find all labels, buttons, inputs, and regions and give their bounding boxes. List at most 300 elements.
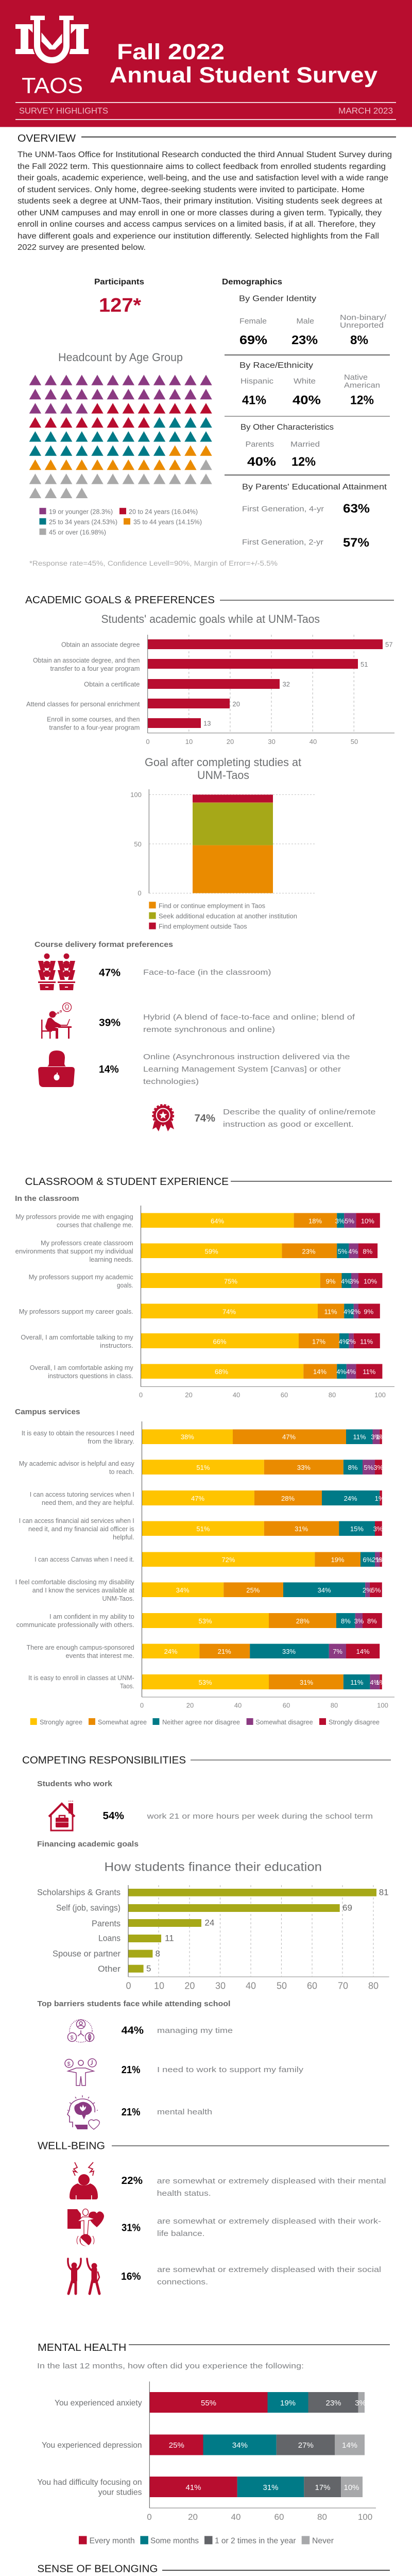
row: academic advisor: 51% (196, 1464, 210, 1471)
bar chart: financing: 80 (368, 1981, 379, 1991)
row: classroom environments (15, 1239, 377, 1263)
by gender identity: 23% (291, 333, 318, 347)
row: tutoring: 28% (281, 1495, 295, 1502)
date: MARCH 2023 (338, 106, 393, 116)
row: talking to instructors: 66% (213, 1337, 227, 1345)
panel: academic goals and preferences (25, 595, 394, 1131)
row: Canvas (35, 1552, 386, 1567)
heading: academic goals: ACADEMIC GOALS & PREFERENCES (25, 595, 215, 606)
stat: work-life balance: 31% (122, 2223, 141, 2234)
bar chart: financing: 0 (126, 1981, 131, 1991)
row: enrollment: It is easy to enroll in classes at UNM- (28, 1674, 134, 1682)
subheading: students who work: Students who work (37, 1780, 113, 1788)
row: asking questions: 14% (313, 1368, 327, 1376)
heading: demographics: Demographics (222, 278, 282, 286)
row: communication confidence: I am confident in my ability to (49, 1613, 134, 1620)
stat: hybrid: Hybrid (A blend of face-to-face and online; blend of (143, 1013, 355, 1022)
row: anxiety: 3% (355, 2399, 366, 2408)
row: engaging courses: courses that challenge me. (57, 1221, 133, 1229)
row: Canvas: 19% (331, 1556, 345, 1564)
row: tutoring: 24% (344, 1495, 357, 1502)
stat: face-to-face: 47% (99, 968, 121, 979)
stat: support family: 21% (122, 2064, 141, 2076)
stat: social connections: 16% (121, 2271, 141, 2282)
row: classroom environments: 4% (348, 1247, 358, 1255)
panel: competing responsibilities (22, 1755, 391, 2129)
stacked bar chart: campus services: 60 (283, 1701, 290, 1709)
stacked bar chart: classroom: 60 (281, 1391, 288, 1399)
row: engaging courses: 10% (361, 1217, 374, 1225)
row: academic goals support: 4% (341, 1278, 351, 1285)
icon: time management network (68, 2020, 94, 2042)
row: enrollment: Taos. (120, 1682, 134, 1690)
stacked bar chart: mental health frequency: 80 (317, 2512, 327, 2522)
panel: well-being (38, 2140, 389, 2294)
chart title: finance education: How students finance their education (104, 1860, 322, 1874)
heading: mental health: MENTAL HEALTH (38, 2342, 126, 2353)
bar chart: academic goals: transfer to a four year program (50, 665, 140, 672)
stacked bar: goal after completing: 100 (130, 791, 142, 799)
stacked bar chart: campus services: 100 (377, 1701, 388, 1709)
row: enrollment: 4% (370, 1679, 380, 1686)
stacked bar chart: classroom: 80 (329, 1391, 336, 1399)
row: career goals support (19, 1303, 380, 1318)
row: disability: UNM-Taos. (102, 1595, 134, 1602)
row: disability (15, 1578, 382, 1602)
stat: managing time: managing my time (157, 2026, 233, 2035)
stat: online quality: 74% (195, 1113, 215, 1124)
row: communication confidence: 8% (367, 1617, 377, 1625)
subheading: top barriers: Top barriers students face while attending school (37, 2000, 230, 2008)
row: academic advisor: My academic advisor is helpful and easy (19, 1460, 134, 1467)
heading: overview: OVERVIEW (18, 133, 76, 144)
row: asking questions: instructors questions in class. (48, 1372, 133, 1380)
row: academic advisor: 3% (373, 1464, 384, 1471)
row: financial aid: I can access financial aid services when I (19, 1517, 134, 1524)
bar chart: academic goals: 32 (282, 681, 290, 688)
stacked bar chart: mental health frequency: 100 (358, 2512, 372, 2522)
bar chart: financing: 70 (338, 1981, 348, 1991)
icon: person thinking at laptop (41, 1003, 72, 1039)
row: financial aid (19, 1517, 383, 1541)
icon: mental health head (67, 2095, 99, 2129)
stat: online: 14% (99, 1064, 119, 1075)
panel: demographics (222, 278, 390, 550)
by race/ethnicity: 12% (350, 394, 374, 407)
row: disability: 34% (176, 1586, 190, 1594)
icon: person with laptop (38, 1050, 75, 1087)
panel: overview (18, 133, 396, 252)
stat: students who work: 54% (103, 1810, 124, 1822)
by parents' educational attainment: 57% (343, 536, 369, 550)
overview paragraph: have different goals and experience our institution differently. Selected highlights from the Fall (18, 232, 379, 241)
by race/ethnicity (239, 361, 380, 407)
icon: two people with raised arms (68, 2259, 99, 2294)
row: library: 47% (282, 1433, 296, 1441)
bar chart: academic goals: 10 (185, 738, 193, 745)
row: engaging courses: 18% (308, 1217, 322, 1225)
stat: mental health status: health status. (157, 2189, 211, 2198)
by other characteristics: 40% (247, 455, 276, 469)
heading: participants: Participants (94, 278, 144, 286)
by gender identity: Female (239, 317, 267, 326)
bar chart: financing: 24 (204, 1918, 214, 1928)
row: Canvas: 72% (221, 1556, 235, 1564)
row: classroom environments: My professors create classroom (41, 1239, 133, 1247)
bar chart: financing: 8 (156, 1949, 160, 1959)
row: financial aid: 31% (295, 1525, 308, 1533)
stat: students who work: work 21 or more hours per week during the school term (147, 1812, 373, 1821)
row: talking to instructors: 17% (312, 1337, 325, 1345)
row: academic goals support: 75% (224, 1278, 237, 1285)
stat: hybrid: remote synchronous and online) (143, 1025, 275, 1034)
row: disability: 34% (318, 1586, 331, 1594)
stat: mental health status: 22% (122, 2175, 143, 2187)
row: academic goals support (29, 1273, 382, 1289)
legend: frequency: Every month (90, 2537, 135, 2546)
row: engaging courses: 5% (345, 1217, 354, 1225)
row: focusing difficulty: 10% (344, 2483, 359, 2492)
heading: sense of belonging: SENSE OF BELONGING (37, 2564, 158, 2575)
overview paragraph: of student services. Only home, degree-seeking students were invited to participate. Home (18, 185, 365, 194)
row: career goals support: 4% (344, 1308, 353, 1316)
row: library: It is easy to obtain the resources I need (22, 1429, 134, 1437)
row: campus events: There are enough campus-sponsored (27, 1643, 134, 1651)
row: campus events: 33% (282, 1648, 296, 1655)
row: career goals support: 11% (324, 1308, 337, 1316)
row: classroom environments: 59% (205, 1247, 218, 1255)
row: tutoring: 47% (191, 1495, 204, 1502)
bar chart: academic goals: Enroll in some courses, and then (47, 716, 140, 723)
subheading: course delivery: Course delivery format preferences (35, 941, 173, 949)
by parents' educational attainment (242, 483, 387, 550)
row: depression: You experienced depression (42, 2441, 142, 2450)
icon: person balancing money and time: $ (67, 2061, 71, 2067)
row: tutoring: 1% (375, 1495, 385, 1502)
stat: work-life balance: life balance. (157, 2229, 204, 2238)
by parents' educational attainment: First Generation, 2-yr (242, 538, 323, 547)
stacked bar chart: classroom (15, 1206, 394, 1399)
row: engaging courses (15, 1213, 380, 1229)
stat: online: Learning Management System [Canvas] or other (143, 1065, 341, 1074)
row: Canvas: 2% (372, 1556, 382, 1564)
stat: hybrid: 39% (99, 1018, 121, 1029)
by race/ethnicity: 41% (242, 394, 266, 407)
row: campus events (27, 1643, 380, 1659)
by race/ethnicity: American (344, 381, 380, 389)
row: academic advisor: to reach. (109, 1468, 134, 1476)
chart title: goal after completing (145, 756, 301, 782)
row: communication confidence (16, 1613, 382, 1629)
stacked bar chart: classroom: 0 (139, 1391, 143, 1399)
row: enrollment: 31% (300, 1679, 313, 1686)
row: academic goals support: My professors support my academic (29, 1273, 133, 1281)
row: asking questions: 4% (346, 1368, 356, 1376)
row: tutoring (30, 1490, 385, 1506)
row: campus events: events that interest me. (66, 1652, 134, 1659)
chart title: academic goals: Students' academic goals while at UNM-Taos (101, 613, 320, 625)
title (110, 40, 377, 88)
stat: 127 participants: 127* (99, 295, 141, 316)
bar chart: financing: 50 (277, 1981, 287, 1991)
row: campus events: 14% (356, 1648, 370, 1655)
row: communication confidence: communicate professionally with others. (16, 1621, 134, 1629)
bar chart: financing (37, 1885, 389, 1991)
stat: managing time: 44% (122, 2025, 144, 2036)
row: anxiety: 55% (201, 2399, 216, 2408)
row: asking questions: 11% (363, 1368, 376, 1376)
bar chart: financing: Scholarships & Grants (37, 1888, 121, 1897)
stat: mental health status (122, 2175, 386, 2198)
row: Canvas: 6% (363, 1556, 373, 1564)
legend: goal after completing (149, 902, 297, 930)
legend: frequency: Some months (150, 2537, 199, 2546)
chart title: headcount by age: Headcount by Age Group (58, 351, 183, 364)
bar chart: financing: 30 (215, 1981, 226, 1991)
row: career goals support: 2% (351, 1308, 361, 1316)
chart title: goal after completing: UNM-Taos (197, 769, 249, 782)
row: asking questions: 68% (215, 1368, 228, 1376)
by gender identity (239, 295, 387, 347)
bar chart: financing: Loans (98, 1933, 121, 1943)
by gender identity: Non-binary/ (340, 313, 387, 322)
legend: age groups: 25 to 34 years (24.53%) (49, 518, 117, 526)
bar chart: financing: 10 (154, 1981, 164, 1991)
row: enrollment: 11% (350, 1679, 364, 1686)
row: communication confidence: 53% (198, 1617, 212, 1625)
stat: online: technologies) (143, 1077, 199, 1086)
logo: UNM Taos: TAOS (22, 74, 83, 98)
row: anxiety: You experienced anxiety (55, 2399, 142, 2408)
row: library: from the library. (88, 1437, 134, 1445)
chart title: goal after completing: Goal after completing studies at (145, 756, 301, 769)
row: library: 38% (181, 1433, 194, 1441)
overview paragraph: students seek a degree at UNM-Taos, their primary institution. Visiting students seek degrees at (18, 197, 383, 206)
bar chart: academic goals: transfer to a four-year program (49, 724, 140, 732)
row: academic goals support: 9% (326, 1278, 336, 1285)
row: campus events: 24% (164, 1648, 178, 1655)
by other characteristics: By Other Characteristics (241, 423, 334, 432)
stacked bar chart: campus services: 40 (234, 1701, 242, 1709)
row: focusing difficulty: 17% (315, 2483, 331, 2492)
row: classroom environments: environments that support my individual (15, 1247, 133, 1255)
by parents' educational attainment: By Parents' Educational Attainment (242, 483, 387, 492)
heading: competing responsibilities: COMPETING RESPONSIBILITIES (22, 1755, 186, 1766)
by gender identity: By Gender Identity (239, 295, 316, 303)
legend: goal after completing: Seek additional education at another institution (159, 912, 297, 920)
row: Canvas: 1% (376, 1556, 386, 1564)
legend: agreement scale: Neither agree nor disagree (162, 1718, 240, 1726)
row: disability: I feel comfortable disclosing my disability (15, 1578, 134, 1586)
stacked bar chart: mental health frequency: 40 (231, 2512, 241, 2522)
legend: agreement scale: Strongly disagree (329, 1718, 380, 1726)
stacked bar chart: classroom: 100 (374, 1391, 386, 1399)
row: academic goals support: goals. (117, 1281, 133, 1289)
stat: mental health status: are somewhat or extremely displeased with their mental (157, 2177, 386, 2185)
pictogram: triangles by age group (29, 375, 212, 498)
row: engaging courses: 3% (335, 1217, 345, 1225)
overview paragraph (18, 150, 392, 252)
overview paragraph: other UNM campuses and may enroll in one or more classes during a given term. Typically, they (18, 209, 382, 217)
bar chart: financing: Self (job, savings) (56, 1903, 121, 1913)
row: academic advisor: 5% (364, 1464, 374, 1471)
by other characteristics (241, 423, 334, 469)
row: focusing difficulty: 41% (185, 2483, 201, 2492)
overview paragraph: enroll in online courses and access campus services on a limited basis, if at all. Therefore, they (18, 220, 375, 229)
stacked bar chart: mental health frequency: 0 (147, 2512, 152, 2522)
row: academic goals support: 3% (349, 1278, 359, 1285)
bar chart: financing: 11 (165, 1933, 174, 1943)
stat: face-to-face (99, 968, 271, 979)
bar chart: financing: 40 (246, 1981, 256, 1991)
row: classroom environments: 5% (338, 1247, 348, 1255)
overview paragraph: their goals, academic experience, well-being, and the use and satisfaction level with a wide range (18, 174, 388, 182)
row: talking to instructors: Overall, I am comfortable talking to my (21, 1333, 133, 1341)
row: classroom environments: 8% (363, 1247, 373, 1255)
bar chart: academic goals: Obtain an associate degree, and then (33, 656, 140, 664)
bar chart: academic goals (26, 635, 394, 745)
row: asking questions (30, 1364, 382, 1380)
stat: online (99, 1053, 350, 1086)
row: tutoring: need them, and they are helpful. (42, 1499, 134, 1506)
row: engaging courses: 64% (211, 1217, 224, 1225)
row: career goals support: My professors support my career goals. (19, 1308, 133, 1315)
stacked bar chart: mental health frequency (37, 2381, 376, 2522)
by parents' educational attainment: First Generation, 4-yr (242, 504, 324, 513)
stacked bar: goal after completing: 0 (138, 889, 142, 897)
stat: online quality: Describe the quality of online/remote (223, 1108, 376, 1116)
stat: social connections (121, 2265, 381, 2286)
row: anxiety (55, 2392, 366, 2413)
title: Annual Student Survey (110, 63, 377, 88)
row: academic advisor: 33% (297, 1464, 311, 1471)
bar chart: financing: 5 (146, 1963, 151, 1973)
stat: support family: I need to work to support my family (157, 2065, 304, 2074)
bar chart: academic goals: 50 (351, 738, 358, 745)
subtitle: survey highlights: SURVEY HIGHLIGHTS (19, 106, 108, 116)
bar chart: academic goals: 57 (385, 641, 392, 649)
stat: face-to-face: Face-to-face (in the classroom) (143, 968, 271, 977)
stat: mental health barrier: 21% (122, 2107, 141, 2118)
row: campus events: 7% (333, 1648, 342, 1655)
row: campus events: 21% (218, 1648, 231, 1655)
stacked bar: goal after completing (130, 789, 316, 897)
bar chart: academic goals: 30 (268, 738, 276, 745)
overview paragraph: the Fall 2022 term. This questionnaire aims to collect feedback from enrolled students regarding (18, 162, 386, 171)
header banner (0, 0, 412, 127)
bar chart: academic goals: Obtain an associate degree (61, 641, 140, 649)
row: focusing difficulty: your studies (98, 2488, 142, 2497)
stat: work-life balance (122, 2217, 381, 2238)
by race/ethnicity: By Race/Ethnicity (239, 361, 313, 370)
stat: support family (122, 2064, 304, 2076)
by race/ethnicity: 40% (293, 394, 321, 407)
legend: frequency (79, 2536, 334, 2546)
by other characteristics: Parents (245, 440, 274, 449)
row: engaging courses: My professors provide me with engaging (15, 1213, 133, 1221)
heading: well-being: WELL-BEING (38, 2140, 105, 2151)
icon: stressed person (70, 2162, 98, 2199)
logo: UNM Taos (15, 15, 89, 98)
row: depression (42, 2434, 365, 2455)
stat: social connections: connections. (157, 2278, 208, 2286)
stat: online quality (195, 1108, 376, 1129)
legend: age groups: 35 to 44 years (14.15%) (133, 518, 202, 526)
row: focusing difficulty (37, 2477, 363, 2497)
row: financial aid: helpful. (113, 1533, 134, 1541)
legend: age groups: 19 or younger (28.3%) (49, 508, 113, 515)
by gender identity: 8% (350, 333, 368, 347)
row: depression: 34% (232, 2441, 248, 2450)
row: academic advisor (19, 1460, 384, 1476)
stacked bar chart: classroom: 40 (233, 1391, 240, 1399)
stacked bar chart: campus services: 0 (140, 1701, 144, 1709)
row: communication confidence: 8% (341, 1617, 351, 1625)
icon: classroom (38, 953, 75, 990)
row: talking to instructors: 4% (339, 1337, 349, 1345)
by gender identity: Unreported (340, 321, 384, 330)
icon: house with briefcase (49, 1801, 75, 1831)
stat: mental health barrier: mental health (157, 2108, 212, 2116)
legend: goal after completing: Find employment outside Taos (159, 923, 247, 930)
overview paragraph: 2022 survey are presented below. (18, 243, 146, 252)
stacked bar chart: mental health frequency: 20 (188, 2512, 198, 2522)
by race/ethnicity: Native (344, 373, 368, 382)
panel: classroom and student experience (15, 1176, 394, 1726)
row: financial aid: 3% (373, 1525, 383, 1533)
by gender identity: 69% (239, 333, 267, 347)
subheading: campus services: Campus services (15, 1408, 80, 1416)
stat: mental health barrier (122, 2107, 212, 2118)
bar chart: financing: 60 (307, 1981, 317, 1991)
bar chart: academic goals: 20 (227, 738, 234, 745)
row: depression: 14% (342, 2441, 357, 2450)
row: talking to instructors: instructors. (100, 1342, 133, 1349)
row: academic advisor: 8% (348, 1464, 358, 1471)
row: talking to instructors: 11% (360, 1337, 373, 1345)
bar chart: financing: Spouse or partner (53, 1949, 121, 1959)
row: anxiety: 23% (325, 2399, 341, 2408)
row: Canvas: I can access Canvas when I need it. (35, 1555, 134, 1563)
row: library: 11% (353, 1433, 366, 1441)
stat: managing time (122, 2025, 233, 2036)
bar chart: academic goals: 0 (146, 738, 150, 745)
legend: age groups: 20 to 24 years (16.04%) (129, 508, 198, 515)
by parents' educational attainment: 63% (343, 502, 370, 516)
row: library: 1% (376, 1433, 386, 1441)
stat: social connections: are somewhat or extremely displeased with their social (157, 2265, 381, 2274)
row: depression: 25% (169, 2441, 184, 2450)
row: talking to instructors (21, 1333, 380, 1349)
legend: goal after completing: Find or continue employment in Taos (159, 902, 265, 910)
icon: work-life balance (67, 2209, 104, 2246)
legend: agreement scale: Somewhat agree (98, 1718, 147, 1726)
icon: person balancing money and time (65, 2059, 96, 2086)
row: enrollment: 1% (376, 1679, 386, 1686)
row: focusing difficulty: 31% (263, 2483, 279, 2492)
panel: mental health (37, 2342, 390, 2546)
bar chart: academic goals: Attend classes for personal enrichment (26, 700, 140, 708)
heading: classroom experience: CLASSROOM & STUDENT EXPERIENCE (25, 1176, 229, 1188)
bar chart: academic goals: 51 (360, 660, 368, 668)
stat: online: Online (Asynchronous instruction delivered via the (143, 1053, 350, 1061)
row: library (22, 1429, 386, 1445)
row: classroom environments: learning needs. (90, 1256, 133, 1263)
row: disability: and I know the services available at (32, 1586, 134, 1594)
row: financial aid: need it, and my financial aid officer is (28, 1525, 134, 1533)
bar chart: academic goals: 40 (310, 738, 317, 745)
subheading: in the classroom: In the classroom (15, 1195, 79, 1203)
